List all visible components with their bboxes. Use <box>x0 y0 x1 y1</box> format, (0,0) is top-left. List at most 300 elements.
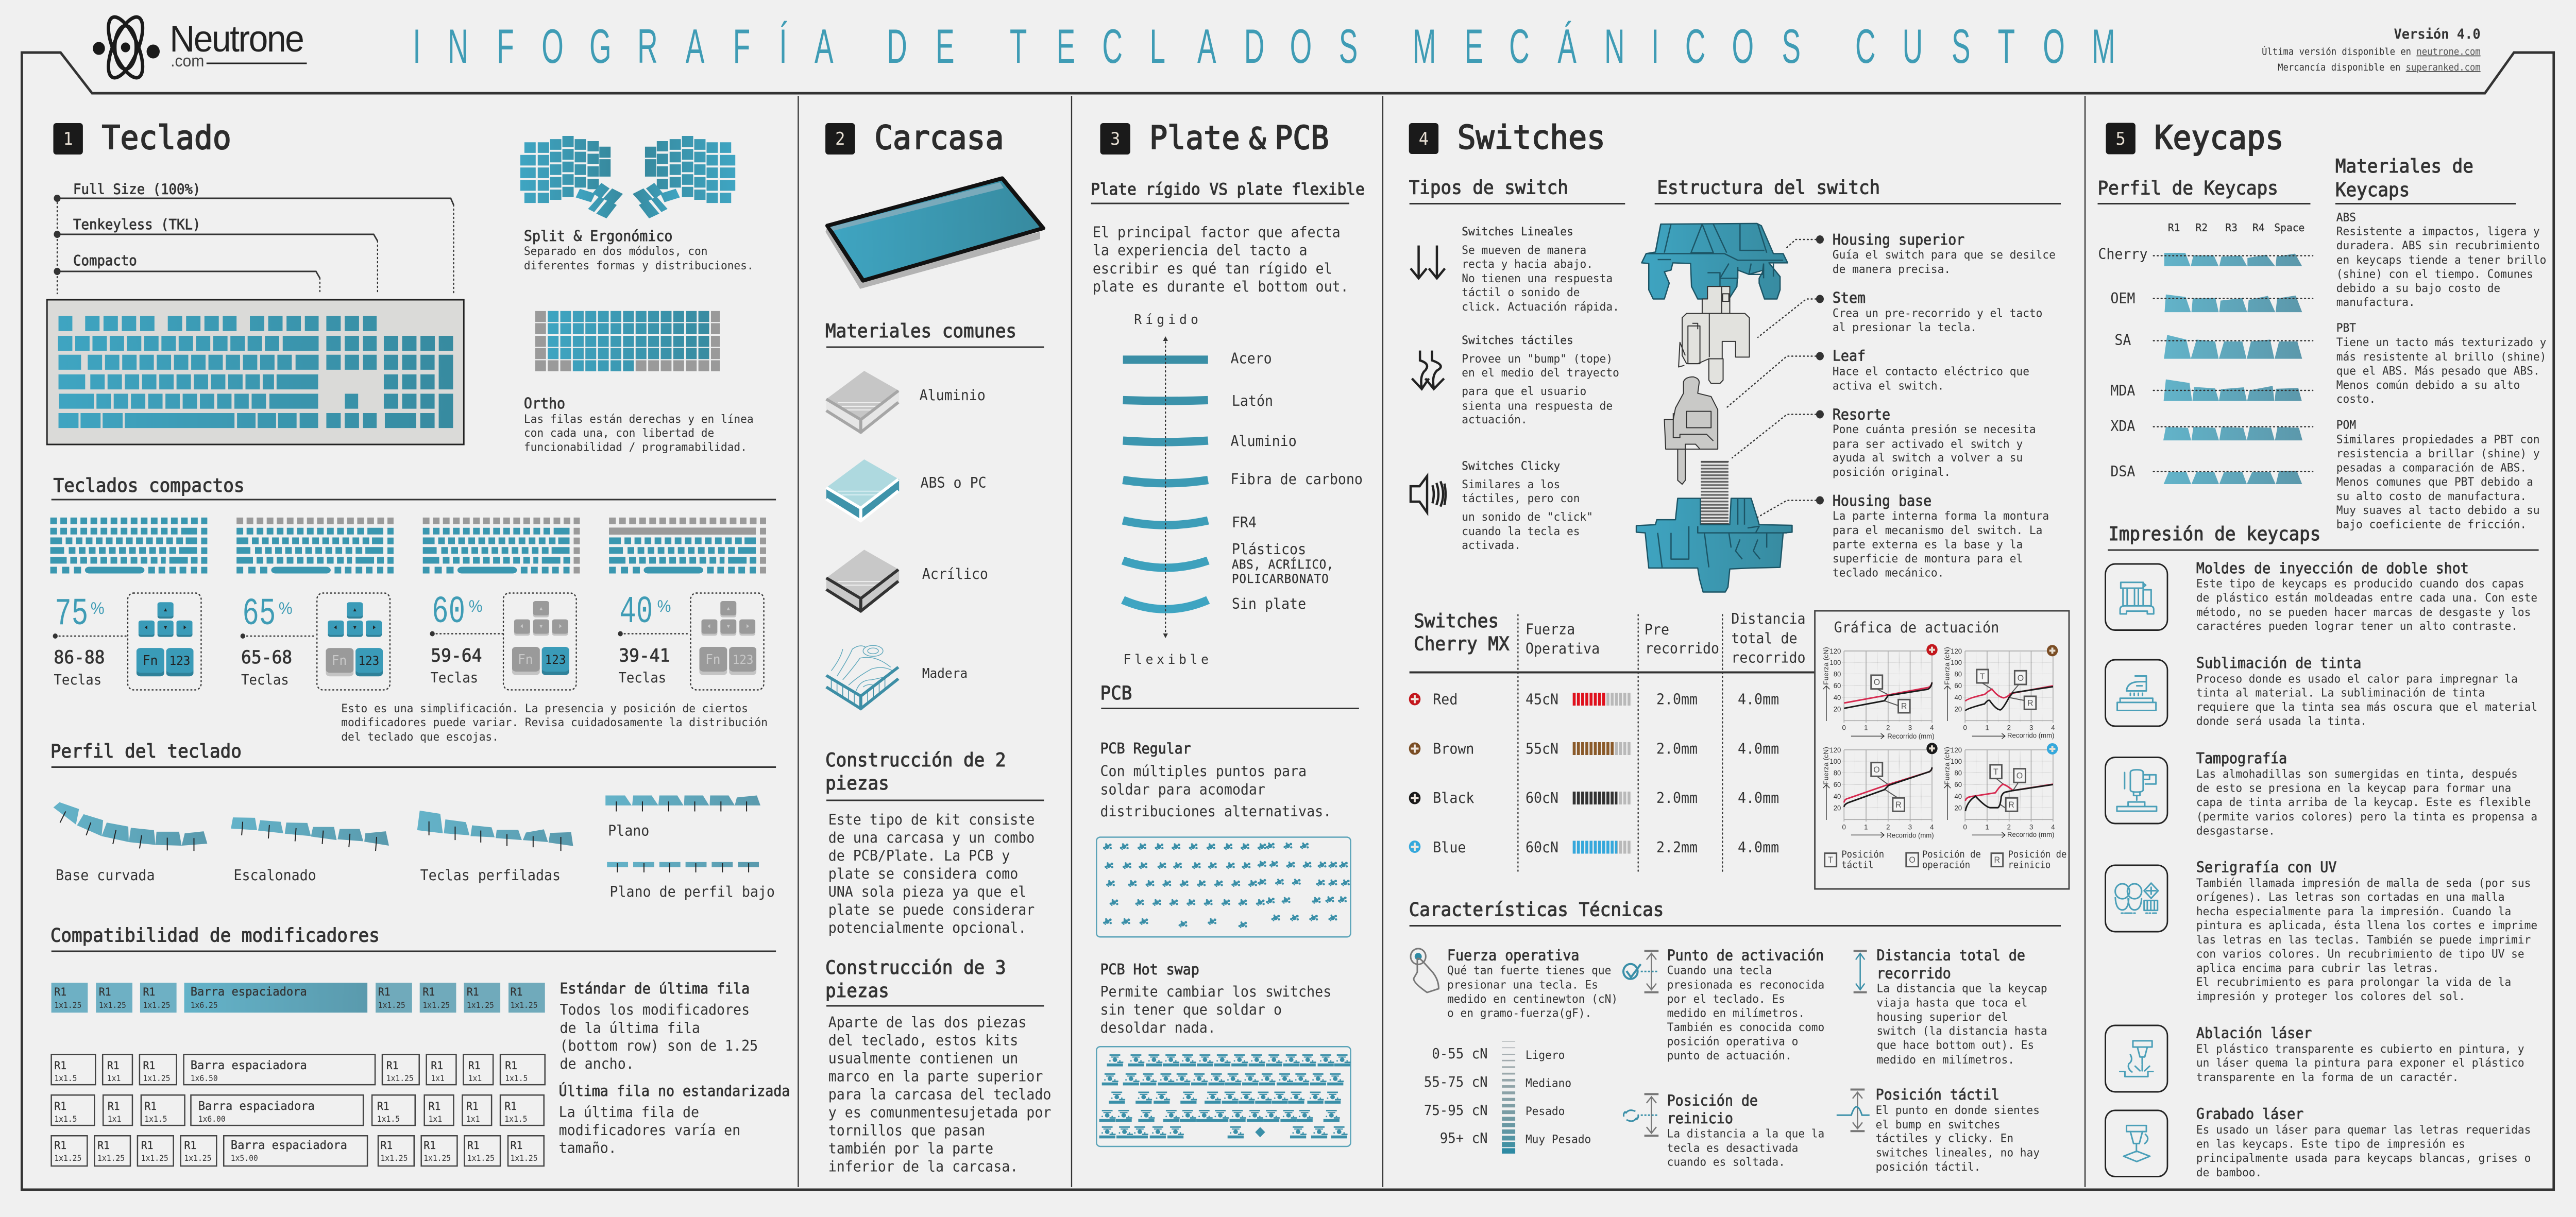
material: madera <box>826 645 899 710</box>
modifier rows: non-standard: R1 <box>141 1139 154 1152</box>
chart: plate flexibility scale: ABS, ACRÍLICO, <box>1232 557 1334 572</box>
text: distancia total de recorrido: housing superior del <box>1877 1010 2008 1024</box>
text: PCB regular: soldar para acomodar <box>1100 782 1265 798</box>
text: punto de activación: También es conocida como <box>1667 1021 1824 1034</box>
modifier rows: non-standard: 1x1.25 <box>380 1154 408 1163</box>
chart labels: 20 <box>1834 705 1841 713</box>
modifier key diagrams: Fn <box>705 652 721 667</box>
modifier rows: non-standard: Barra espaciadora <box>231 1138 347 1152</box>
compact sizes: percent, keys count: 59-64 <box>431 645 482 666</box>
table: switches cherry MX: recorrido <box>1731 650 1806 666</box>
section badge 1 <box>53 123 83 155</box>
chart labels: 1 <box>1985 724 1989 732</box>
callouts: switch parts: Pone cuánta presión se necesita <box>1833 423 2036 436</box>
version info: Última versión disponible en neutrone.com <box>2262 46 2481 58</box>
housing base <box>1636 499 1792 592</box>
heading: plate rígido vs flexible: Plate rígido VS plate flexible <box>1091 180 1365 199</box>
chart labels: 0 <box>1963 724 1967 732</box>
chart labels: 1 <box>1864 823 1868 831</box>
chart: black <box>1823 743 1938 838</box>
text: sublimación: tinta al material. La subliminación de tinta <box>2196 687 2485 700</box>
keycap profile chart: R3 <box>2225 221 2238 234</box>
section badge 3: 3 <box>1110 128 1120 149</box>
chart: plate flexibility scale: Acero <box>1231 351 1272 367</box>
profile diagrams: Teclas perfiladas <box>420 867 561 884</box>
text: switches lineales: click. Actuación rápida. <box>1462 300 1619 314</box>
chart: force scale <box>1502 1041 1515 1154</box>
chart labels: 20 <box>1834 804 1841 812</box>
text: fuerza operativa: o en gramo-fuerza(gF). <box>1447 1007 1591 1020</box>
icon: linear arrows <box>1411 246 1445 278</box>
text: ABS: (shine) con el tiempo. Comunes <box>2336 268 2533 281</box>
row: black: 4.0mm <box>1738 790 1779 807</box>
row: black <box>1409 790 1779 807</box>
text: posición de reinicio: Posición de <box>1667 1093 1758 1109</box>
icon: atom <box>94 12 158 83</box>
text: tampografía: de esto se presiona en la keycap para formar una <box>2196 782 2511 795</box>
heading: teclados compactos: Teclados compactos <box>53 475 244 496</box>
labels: force scale: 75-95 cN <box>1424 1102 1488 1119</box>
chart labels: 80 <box>1954 670 1962 678</box>
text: PCB hot swap: PCB Hot swap <box>1100 962 1199 978</box>
heading: compatibilidad: Compatibilidad de modificadores <box>50 925 380 947</box>
row: blue <box>1409 839 1779 856</box>
text: ortho: Las filas están derechas y en línea <box>524 413 754 426</box>
text: doble shot: de plástico están moldeadas entre cada una. Con este <box>2196 591 2537 605</box>
heading: materiales comunes: Materiales comunes <box>825 320 1016 342</box>
heading: Switches: Switches <box>1458 118 1605 157</box>
modifier rows: non-standard: Barra espaciadora <box>198 1099 315 1113</box>
text: switches clicky: un sonido de "click" <box>1462 510 1593 524</box>
chart labels: 3 <box>1908 823 1912 831</box>
callouts: switch parts: ayuda al switch a volver a su <box>1833 451 2023 465</box>
housing superior <box>1641 224 1788 299</box>
text: POM: pesadas a comparación de ABS. <box>2336 461 2527 475</box>
modifier row: standard: 1x6.25 <box>191 1001 218 1010</box>
modifier rows: non-standard: 1x5.00 <box>231 1154 258 1163</box>
row: red <box>1409 692 1779 708</box>
text: serigrafía: las letras en las teclas. También se puede imprimir <box>2196 933 2531 947</box>
chart labels: O <box>2016 771 2023 781</box>
text: estándar de última fila: de la última fila <box>560 1020 700 1037</box>
modifier rows: non-standard: R1 <box>431 1059 443 1072</box>
text: PBT: que el ABS. Más pesado que ABS. <box>2336 365 2540 378</box>
text: plate intro: escribir es qué tan rígido el <box>1093 261 1332 277</box>
keycap profile chart: Space <box>2274 221 2304 234</box>
callouts: switch parts: teclado mecánico. <box>1833 567 1944 580</box>
text: doble shot: Este tipo de keycaps es producido cuando dos capas <box>2196 577 2524 591</box>
labels: force scale: 0-55 cN <box>1432 1045 1488 1062</box>
text: punto de activación: por el teclado. Es <box>1667 992 1785 1006</box>
modifier key diagrams: Fn <box>143 653 158 668</box>
compact sizes: percent, keys count: 65 <box>242 592 276 636</box>
text: PCB regular: distribuciones alternativas. <box>1100 803 1331 820</box>
chart labels: 40 <box>1954 694 1962 701</box>
chart labels: 2 <box>1886 724 1890 732</box>
chart labels: 0 <box>1842 724 1846 732</box>
icon: reset point <box>1623 1094 1658 1136</box>
modifier row: standard: R1 <box>143 985 155 998</box>
labels: materials <box>920 387 988 681</box>
plano <box>605 796 760 811</box>
icon: ortho keyboard <box>535 317 720 366</box>
chart labels: 60 <box>1954 682 1962 690</box>
chart labels: 120 <box>1951 647 1962 655</box>
text: serigrafía: orígenes). Las letras son cortadas en una malla <box>2196 890 2504 904</box>
text: switches lineales: táctil o sonido de <box>1462 286 1580 299</box>
text: posición de reinicio: cuando es soltada. <box>1667 1156 1785 1169</box>
text: ablación láser: un láser quema la pintura para exponer el plástico <box>2196 1056 2524 1070</box>
row: red: Red <box>1433 692 1458 708</box>
heading: perfil del teclado: Perfil del teclado <box>50 741 242 762</box>
text: POM: Muy suaves al tacto debido a su <box>2336 504 2540 517</box>
row: red: 4.0mm <box>1738 692 1779 708</box>
text: distancia total de recorrido: recorrido <box>1877 966 1951 982</box>
heading: características técnicas: Características Técnicas <box>1409 899 1664 921</box>
text: última fila no estandarizada: Última fila no estandarizada <box>559 1082 790 1100</box>
modifier rows: non-standard: R1 <box>54 1139 66 1152</box>
callouts: switch parts: para el mecanismo del switch. La <box>1833 524 2042 537</box>
section badge 4: 4 <box>1419 128 1429 149</box>
text: posición táctil: El punto en donde sientes <box>1876 1104 2040 1117</box>
modifier rows: non-standard: R1 <box>97 1139 110 1152</box>
modifier row: standard: R1 <box>378 985 391 998</box>
chart: plate flexibility scale: Plásticos <box>1232 541 1306 558</box>
text: PCB hot swap: sin tener que soldar o <box>1100 1002 1282 1018</box>
labels: materials: Acrílico <box>922 566 988 582</box>
labels: force scale: Muy Pesado <box>1526 1133 1591 1146</box>
chart labels: 1 <box>1985 823 1989 831</box>
keycap profile chart: R4 <box>2252 221 2265 234</box>
compact sizes: percent, keys count: 40 <box>619 590 653 634</box>
text: ABS: manufactura. <box>2336 296 2415 309</box>
text: ablación láser: transparente en la forma de un caractér. <box>2196 1071 2459 1084</box>
text: estándar de última fila: Estándar de última fila <box>560 981 750 997</box>
chart labels: operación <box>1922 860 1970 871</box>
keycap profile chart: R2 <box>2196 221 2208 234</box>
text: split & ergonómico: Separado en dos módulos, con <box>524 245 707 258</box>
text: switches clicky: Switches Clicky <box>1462 459 1560 473</box>
text: ABS: ABS <box>2336 211 2356 225</box>
chart: plate flexibility scale: Latón <box>1232 393 1273 409</box>
text: serigrafía: impresión y proteger los colores del sol. <box>2196 990 2465 1003</box>
chart panel: gráfica de actuación <box>1815 611 2069 889</box>
text: 2 piezas: plate se puede considerar <box>828 902 1035 918</box>
panel: 2 Carcasa <box>825 118 1051 1175</box>
compact sizes: percent, keys count <box>53 590 690 688</box>
heading: construcción de 2 piezas: Construcción de 2 <box>825 749 1006 771</box>
chart labels: 0 <box>1842 823 1846 831</box>
text: POM: Similares propiedades a PBT con <box>2336 433 2540 447</box>
text: última fila no estandarizada: modificadores varía en <box>559 1122 740 1139</box>
modifier row: standard <box>52 983 545 1013</box>
heading: Carcasa: Carcasa <box>874 118 1004 157</box>
modifier rows: non-standard: 1x1.25 <box>423 1154 451 1163</box>
modifier row: standard: 1x1.25 <box>54 1001 81 1010</box>
icons: technical characteristics <box>1411 949 1870 1154</box>
labels: force scale: Mediano <box>1526 1077 1571 1090</box>
chart labels: Recorrido (mm) <box>1887 831 1934 839</box>
icon: tactile position <box>1837 1090 1870 1131</box>
text: POM: bajo coeficiente de fricción. <box>2336 518 2527 532</box>
text: switches táctiles: Switches táctiles <box>1462 334 1573 347</box>
text: switches clicky: Similares a los <box>1462 478 1560 491</box>
icon: ablación láser <box>2106 1025 2167 1092</box>
chart labels: 4 <box>2051 724 2055 732</box>
chart labels: 100 <box>1829 758 1841 765</box>
row: brown: 2.0mm <box>1656 741 1698 758</box>
text: grabado láser: Es usado un láser para quemar las letras requeridas <box>2196 1123 2531 1137</box>
note: Esto es una simplificación. La presencia y posición de ciertos <box>341 702 748 715</box>
table: switches cherry MX: Operativa <box>1526 641 1600 657</box>
text: 3 piezas: del teclado, estos kits <box>828 1033 1018 1049</box>
modifier rows: non-standard: 1x1 <box>107 1074 121 1083</box>
logo: Neutrone <box>94 12 307 83</box>
labels: force scale: 55-75 cN <box>1424 1074 1488 1090</box>
text: serigrafía: pintura es aplicada, ésta llena los cortes e imprime <box>2196 919 2537 932</box>
modifier rows: non-standard: 1x1.25 <box>511 1154 538 1163</box>
profile diagrams: Base curvada <box>56 867 155 884</box>
text: sublimación: Sublimación de tinta <box>2196 655 2361 672</box>
modifier key diagrams <box>128 593 764 690</box>
text: POM: POM <box>2336 419 2356 432</box>
text: PCB hot swap: desoldar nada. <box>1100 1020 1216 1036</box>
note: modificadores puede variar. Revisa cuidadosamente la distribución <box>341 716 768 729</box>
profile diagrams <box>54 796 775 900</box>
chart labels: 120 <box>1829 746 1841 754</box>
text: doble shot: método, no se pueden hacer marcas de desgaste y los <box>2196 606 2531 619</box>
modifier rows: non-standard: 1x1.25 <box>184 1154 211 1163</box>
heading: perfil de keycaps: Perfil de Keycaps <box>2097 178 2278 199</box>
chart labels: T <box>1993 767 1998 777</box>
text: ablación láser: Ablación láser <box>2196 1025 2312 1042</box>
keyboard size brackets: Compacto <box>73 252 137 269</box>
compact sizes: percent, keys count: 65-68 <box>241 647 292 668</box>
modifier rows: non-standard: 1x1 <box>108 1115 121 1124</box>
chart labels: 3 <box>2029 724 2033 732</box>
modifier row: standard: 1x1.25 <box>422 1001 450 1010</box>
text: ABS: Resistente a impactos, ligera y <box>2336 225 2540 238</box>
chart labels: 2 <box>2007 724 2011 732</box>
row: brown: 55cN <box>1526 741 1558 758</box>
text: serigrafía: aplica encima para cubrir las letras. <box>2196 962 2439 975</box>
callouts: switch parts: al presionar la tecla. <box>1833 321 1977 334</box>
text: switches táctiles: sienta una respuesta de <box>1462 400 1613 413</box>
text: distancia total de recorrido: medido en milímetros. <box>1877 1053 2014 1067</box>
chart labels: Fuerza (cN) <box>1822 747 1829 785</box>
material: acrílico <box>826 550 899 612</box>
modifier key diagrams: 123 <box>359 654 379 668</box>
callouts: switch parts: Crea un pre-recorrido y el tacto <box>1833 307 2042 320</box>
text: serigrafía: El recubrimiento es para prolongar la vida de la <box>2196 975 2511 989</box>
chart labels: Recorrido (mm) <box>1887 732 1935 740</box>
section badge 4 <box>1409 123 1438 154</box>
icon: hand press <box>1411 949 1438 992</box>
callouts: switch parts: activa el switch. <box>1833 380 1944 393</box>
chart labels: 120 <box>1951 746 1962 754</box>
text: distancia total de recorrido: viaja hasta que toca el <box>1877 997 2027 1010</box>
modifier rows: non-standard: R1 <box>468 1059 481 1072</box>
text: PBT: costo. <box>2336 392 2376 406</box>
diagram: PCB regular <box>1096 837 1351 937</box>
heading: Keycaps: Keycaps <box>2155 118 2284 157</box>
text: POM: Menos comunes que PBT debido a <box>2336 475 2533 489</box>
row: brown: 4.0mm <box>1738 741 1779 758</box>
chart labels: Posición de <box>2008 850 2066 860</box>
table: switches cherry MX: total de <box>1731 630 1798 647</box>
modifier rows: non-standard: R1 <box>467 1139 480 1152</box>
modifier rows: non-standard: 1x1.5 <box>54 1074 77 1083</box>
chart labels: Fuerza (cN) <box>1943 747 1951 785</box>
chart: plate flexibility scale: POLICARBONATO <box>1232 572 1329 586</box>
modifier rows: non-standard: R1 <box>511 1139 522 1152</box>
title: INFOGRAFÍA DE TECLADOS MECÁNICOS CUSTOM <box>413 20 2115 74</box>
material: aluminio <box>826 371 899 434</box>
panel: 5 Keycaps <box>2097 118 2546 1179</box>
text: tampografía: Las almohadillas son sumergidas en tinta, después <box>2196 767 2518 781</box>
text: tampografía: Tampografía <box>2196 750 2287 767</box>
modifier rows: non-standard: 1x1.5 <box>505 1074 528 1083</box>
chart labels: 80 <box>1834 670 1841 678</box>
profile diagrams: Plano de perfil bajo <box>609 884 775 900</box>
chart labels: 2 <box>2007 823 2011 831</box>
modifier rows: non-standard: 1x1.25 <box>143 1074 170 1083</box>
row: red: 2.0mm <box>1656 692 1698 708</box>
text: switches táctiles: para que el usuario <box>1462 385 1586 398</box>
chart labels: reinicio <box>2008 860 2050 871</box>
chart labels: 120 <box>1829 647 1841 655</box>
callouts: switch parts: La parte interna forma la montura <box>1833 509 2049 523</box>
text: switches lineales: recta y hacia abajo. <box>1462 258 1593 271</box>
heading: impresión de keycaps: Impresión de keycaps <box>2108 523 2320 545</box>
text: doble shot: caractéres pueden lograr tener un alto contraste. <box>2196 620 2518 633</box>
text: serigrafía: También llamada impresión de malla de seda (por sus <box>2196 877 2531 890</box>
icon: serigrafía <box>2106 865 2167 932</box>
labels: materials: ABS o PC <box>920 475 987 491</box>
chart labels: táctil <box>1841 860 1873 871</box>
chart labels: T <box>1828 855 1833 865</box>
table: switches cherry MX: Distancia <box>1731 611 1806 627</box>
text: ABS: debido a su bajo costo de <box>2336 282 2500 295</box>
text: ortho: con cada una, con libertad de <box>524 426 714 440</box>
section badge 2 <box>825 123 855 155</box>
version info: Versión 4.0 <box>2394 26 2481 42</box>
chart labels <box>1822 647 2066 871</box>
panel: 1 Teclado <box>47 118 790 1166</box>
chart labels: O <box>1874 678 1880 687</box>
modifier rows: non-standard: 1x1 <box>466 1115 480 1124</box>
chart labels: T <box>1980 672 1985 681</box>
table: switches cherry MX: Switches <box>1414 610 1499 632</box>
modifier rows: non-standard: 1x1 <box>429 1115 442 1124</box>
chart panel: gráfica de actuación: Gráfica de actuación <box>1834 620 1999 636</box>
text: ablación láser: El plástico transparente es cubierto en pintura, y <box>2196 1042 2524 1056</box>
callouts: switch parts: Guía el switch para que se desilce <box>1833 248 2056 262</box>
profile diagrams: Plano <box>608 823 649 839</box>
modifier row: standard: 1x1.25 <box>511 1001 538 1010</box>
text: última fila no estandarizada: La última fila de <box>559 1104 699 1121</box>
section badge 1: 1 <box>63 128 73 149</box>
materials icons <box>826 371 899 710</box>
section badge 5 <box>2106 123 2136 155</box>
compact keyboards <box>50 521 766 574</box>
chart labels: 4 <box>2051 823 2055 831</box>
chart labels: 100 <box>1829 659 1841 666</box>
text: ABS: duradera. ABS sin recubrimiento <box>2336 239 2540 252</box>
chart: blue <box>1944 743 2058 838</box>
callouts: switch parts: superficie de montura para el <box>1833 552 2023 565</box>
modifier rows: non-standard: R1 <box>505 1059 517 1072</box>
modifier row: standard: R1 <box>54 985 66 998</box>
chart labels: 4 <box>1930 823 1934 831</box>
text: grabado láser: principalmente usada para keycaps blancas, grises o <box>2196 1152 2531 1165</box>
note: del teclado que escojas. <box>341 730 499 744</box>
row: black: 60cN <box>1526 790 1558 807</box>
text: última fila no estandarizada: tamaño. <box>559 1140 617 1157</box>
text: 3 piezas: tornillos que pasan <box>828 1123 985 1139</box>
text: switches clicky: activada. <box>1462 539 1521 552</box>
icon: total travel <box>1854 951 1867 992</box>
heading: PCB: PCB <box>1100 682 1132 704</box>
chart labels: 1 <box>1864 724 1868 732</box>
text: PCB regular: PCB Regular <box>1100 741 1191 757</box>
callouts: switch parts: Hace el contacto eléctrico que <box>1833 365 2029 379</box>
chart labels: 20 <box>1954 804 1962 812</box>
text: posición de reinicio: La distancia a la que la <box>1667 1127 1824 1141</box>
text: 3 piezas: para la carcasa del teclado <box>828 1087 1051 1103</box>
text: plate intro: plate es durante el bottom out. <box>1093 279 1349 295</box>
chart: plate flexibility scale: Sin plate <box>1232 596 1306 612</box>
keyboard size brackets: Full Size (100%) <box>73 181 200 198</box>
section badge 5: 5 <box>2116 128 2126 149</box>
chart labels: 100 <box>1951 659 1962 666</box>
labels: force scale <box>1424 1045 1591 1146</box>
modifier rows: non-standard: 1x1 <box>468 1074 482 1083</box>
callouts: switch parts: parte externa es la base y la <box>1833 538 2023 552</box>
text: posición táctil: Posición táctil <box>1876 1087 1999 1103</box>
compact sizes: percent, keys count: % <box>657 597 671 615</box>
callouts: switch parts: Leaf <box>1833 348 1866 365</box>
modifier rows: non-standard: R1 <box>466 1100 479 1112</box>
modifier key diagrams: Fn <box>518 652 533 667</box>
callouts: switch parts <box>1727 232 2056 580</box>
chart: brown <box>1944 645 2058 739</box>
text: distancia total de recorrido: que hace bottom out). Es <box>1877 1039 2034 1052</box>
chart labels: 3 <box>1908 724 1912 732</box>
text: tampografía: desgastarse. <box>2196 825 2275 838</box>
chart labels: 80 <box>1954 769 1962 777</box>
modifier rows: non-standard: R1 <box>380 1139 393 1152</box>
text: switches táctiles: actuación. <box>1462 413 1528 426</box>
text: switches lineales: Se mueven de manera <box>1462 244 1586 257</box>
text: PCB regular: Con múltiples puntos para <box>1100 763 1307 780</box>
logo: Neutrone: Neutrone <box>170 18 304 59</box>
chart labels: 40 <box>1834 793 1841 800</box>
row: blue: 60cN <box>1526 839 1558 856</box>
modifier rows: non-standard: R1 <box>423 1139 436 1152</box>
panel: 3 Plate & PCB <box>1091 119 1365 1146</box>
callouts: switch parts: Resorte <box>1833 407 1890 423</box>
text: PBT: PBT <box>2336 321 2356 335</box>
keycap profile chart: R1 <box>2168 221 2180 234</box>
panel: 3 Plate & PCB: PCB <box>1275 119 1329 157</box>
text: tampografía: (permite varios colores) pero la tinta es propensa a <box>2196 810 2537 824</box>
escalonado <box>231 817 389 851</box>
text: switches clicky: táctiles, pero con <box>1462 492 1580 505</box>
text: POM: su alto costo de manufactura. <box>2336 490 2527 503</box>
compact sizes: percent, keys count: Teclas <box>618 670 666 686</box>
profile diagrams: Escalonado <box>233 867 316 884</box>
